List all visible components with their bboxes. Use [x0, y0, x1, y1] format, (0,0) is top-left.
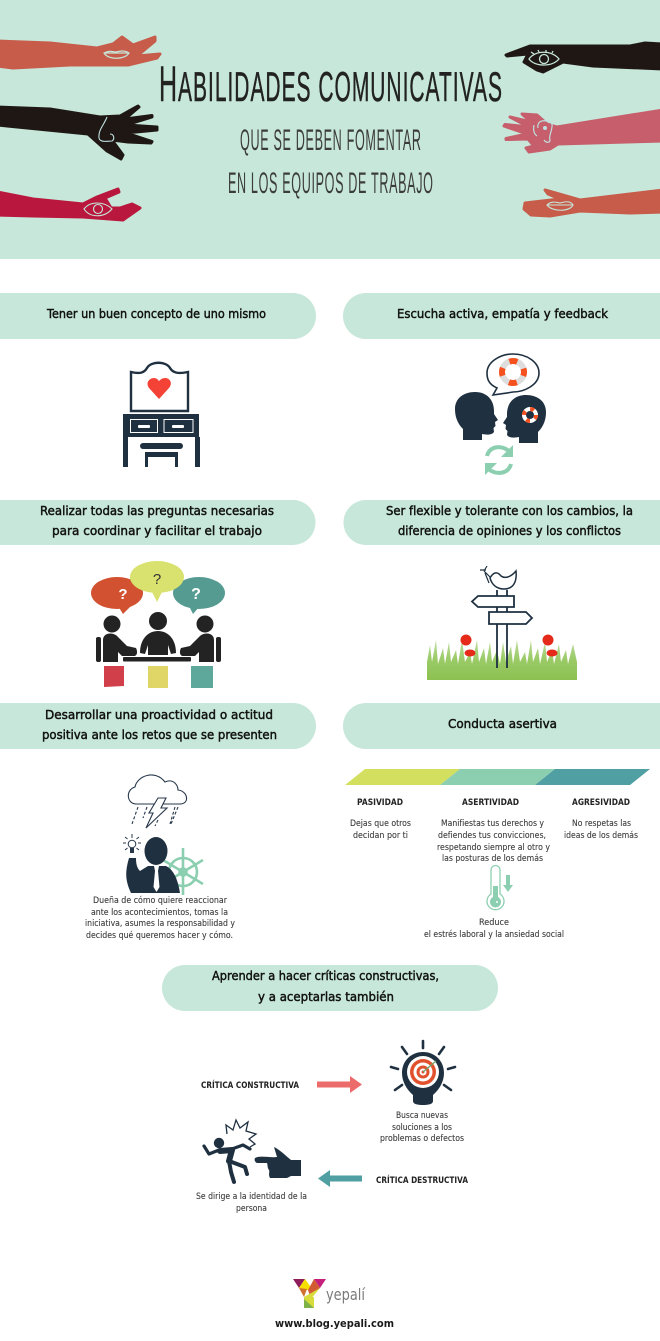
column: asertividad: ASERTIVIDAD	[462, 798, 519, 808]
icon: meeting with question bubbles and notes	[91, 561, 225, 688]
text block: se dirige a la identidad	[196, 1192, 307, 1214]
logo: yepalí: yepalí	[326, 1285, 365, 1304]
column: asertividad	[437, 798, 550, 864]
text block: busca nuevas soluciones: Busca nuevas	[396, 1111, 449, 1121]
text block: reduce: el estrés laboral y la ansiedad social	[424, 929, 564, 940]
column: pasividad	[350, 798, 412, 841]
heading: para coordinar y facilitar el trabajo	[52, 524, 262, 538]
icon: crimson hand with eye, bottom left	[0, 189, 140, 220]
heading	[0, 500, 316, 545]
title: HABILIDADES COMUNICATIVAS	[159, 57, 502, 112]
arrow: destructive	[318, 1170, 362, 1187]
panel: preguntas necesarias	[0, 500, 316, 688]
heading: positiva ante los retos que se presenten	[42, 728, 277, 742]
text block: busca nuevas soluciones: problemas o defectos	[380, 1134, 465, 1144]
column: asertividad: Manifiestas tus derechos y	[441, 819, 544, 829]
column: asertividad: defiendes tus convicciones,	[438, 831, 546, 841]
icon: light bulb with target	[391, 1041, 455, 1105]
heading	[162, 965, 498, 1011]
icon: vanity with heart	[123, 363, 200, 467]
subtitle: QUE SE DEBEN FOMENTAR	[240, 123, 421, 157]
icon: meeting with question bubbles and notes: ?	[191, 586, 201, 603]
heading: Escucha activa, empatía y feedback	[397, 307, 608, 321]
logo: yepalí	[293, 1279, 365, 1308]
text block: ante los acontecimientos, tomas la	[91, 908, 228, 918]
icon: salmon hand with mouth, top left	[0, 37, 160, 68]
heading: Ser flexible y tolerante con los cambios, la	[386, 504, 633, 518]
icon: thermometer with down arrow	[487, 866, 513, 910]
text block: Dueña de cómo quiere reaccionar	[93, 895, 227, 906]
column: pasividad: PASIVIDAD	[357, 798, 403, 808]
icon: signpost with bird, grass and poppies	[427, 566, 577, 680]
panel: flexible y tolerante	[344, 500, 660, 680]
icon: black hand with nose, middle left	[0, 106, 157, 159]
column: pasividad: decidan por ti	[353, 831, 408, 841]
heading: Desarrollar una proactividad o actitud	[45, 708, 273, 722]
heading: Aprender a hacer críticas constructivas,	[212, 969, 439, 983]
text block: busca nuevas soluciones	[380, 1111, 465, 1144]
text block: iniciativa, asumes la responsabilidad y	[85, 919, 235, 929]
label: crítica constructiva: CRÍTICA CONSTRUCTIVA	[201, 1079, 299, 1091]
icon: pink hand with ear, middle right	[504, 110, 660, 152]
label: crítica destructiva: CRÍTICA DESTRUCTIVA	[376, 1174, 468, 1186]
column: agresividad	[564, 798, 639, 841]
icon: falling person and pointing hand	[204, 1120, 301, 1182]
icon: meeting with question bubbles and notes: ?	[118, 586, 128, 603]
text block: se dirige a la identidad: Se dirige a la identidad de la	[196, 1192, 307, 1202]
website url: www.blog.yepali.com	[275, 1317, 394, 1330]
text block	[85, 895, 235, 941]
panel: header banner	[0, 0, 660, 259]
chart: assertiveness spectrum bar	[345, 769, 650, 785]
subtitle	[228, 123, 433, 200]
heading: diferencia de opiniones y los conflictos	[398, 524, 621, 538]
column: pasividad: Dejas que otros	[350, 819, 412, 829]
icon: meeting with question bubbles and notes: ?	[153, 571, 161, 588]
heading	[343, 703, 660, 749]
icon: storm cloud with lightning	[128, 775, 187, 828]
heading	[344, 500, 660, 545]
heading	[0, 293, 316, 339]
text block: reduce	[424, 918, 564, 940]
text block: se dirige a la identidad: persona	[236, 1204, 267, 1214]
heading	[343, 293, 660, 339]
heading: y a aceptarlas también	[258, 990, 394, 1004]
text block: decides qué queremos hacer y cómo.	[86, 930, 233, 941]
heading	[0, 703, 316, 749]
heading: Realizar todas las preguntas necesarias	[40, 504, 274, 518]
panel: tener un buen concepto	[0, 293, 316, 467]
heading: Conducta asertiva	[448, 717, 557, 731]
panel: escucha activa	[343, 293, 660, 475]
column: asertividad: las posturas de los demás	[442, 854, 544, 864]
column: agresividad: AGRESIVIDAD	[572, 798, 630, 808]
column: agresividad: No respetas las	[572, 819, 632, 829]
column: agresividad: ideas de los demás	[564, 831, 639, 841]
text block: reduce: Reduce	[479, 918, 509, 928]
icon: two heads with speech bubble	[455, 354, 546, 475]
icon: person with idea bulb and ship wheel	[123, 834, 203, 895]
panel: conducta asertiva	[343, 703, 660, 940]
icon: salmon hand with mouth, bottom right	[524, 190, 660, 216]
text block: busca nuevas soluciones: soluciones a los	[392, 1123, 453, 1133]
heading: Tener un buen concepto de uno mismo	[46, 307, 266, 321]
panel: críticas constructivas	[162, 965, 498, 1214]
column: asertividad: respetando siempre al otro y	[437, 843, 550, 853]
subtitle: EN LOS EQUIPOS DE TRABAJO	[228, 166, 433, 200]
icon: black hand with eye, top right	[506, 43, 660, 72]
arrow: constructive	[317, 1076, 362, 1093]
panel: proactividad	[0, 703, 316, 941]
